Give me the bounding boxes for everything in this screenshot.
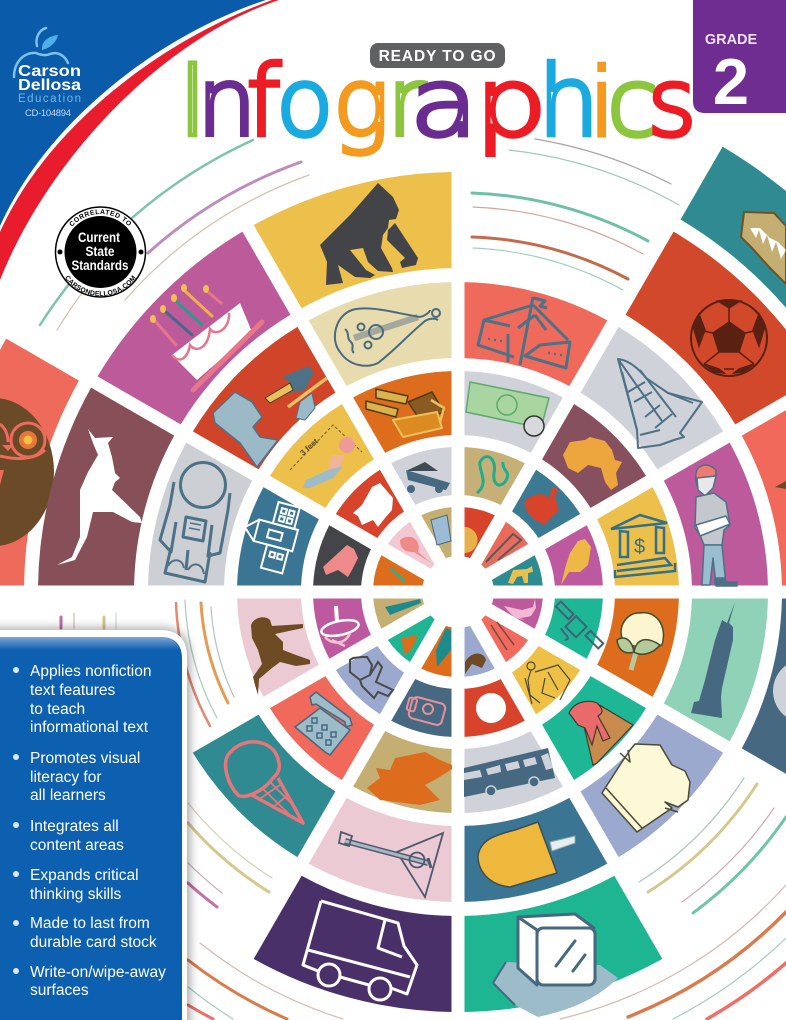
sector: birthday cake xyxy=(98,205,314,444)
sector: statue xyxy=(193,308,354,483)
sector: jar xyxy=(391,679,452,737)
sector: three feet xyxy=(270,391,390,517)
bullet list: Made to last from xyxy=(30,915,150,932)
panel: features list xyxy=(0,628,190,1020)
sector: horse xyxy=(491,555,550,607)
sector: money xyxy=(464,371,563,453)
logo: Carson Dellosa xyxy=(14,28,81,119)
icon: snake xyxy=(477,457,508,493)
sector: coal car xyxy=(391,433,472,513)
sector: skeleton xyxy=(500,641,580,722)
title: I xyxy=(178,44,207,159)
sector: turkey xyxy=(507,470,588,550)
logo: Carson Dellosa: Carson xyxy=(18,63,81,80)
inner ring sectors xyxy=(366,500,550,684)
title: r xyxy=(387,49,426,158)
sector: clock xyxy=(742,598,786,796)
logo: Carson Dellosa: CD-104894 xyxy=(25,108,71,119)
icon: canary xyxy=(561,539,591,585)
icon: t-shirt xyxy=(602,744,690,832)
icon: cake xyxy=(150,284,262,390)
bullet list: surfaces xyxy=(30,982,89,999)
sector: phone xyxy=(421,500,473,559)
sector: bison xyxy=(313,525,371,586)
bullet list: thinking skills xyxy=(30,886,122,903)
bullet list: Write-on/wipe-away xyxy=(30,964,166,981)
sector: gorilla xyxy=(254,126,493,343)
sector: telephone xyxy=(257,660,383,780)
sector: soccer ball xyxy=(606,232,786,448)
sector: kangaroo xyxy=(38,388,174,586)
bullet list: all learners xyxy=(30,787,106,804)
icon: popsicle xyxy=(478,822,575,887)
title: g xyxy=(333,49,389,158)
sector: snake xyxy=(464,447,525,505)
icon: truck xyxy=(303,901,417,1000)
icon: bones xyxy=(525,662,570,704)
icon: africa map xyxy=(563,437,622,490)
icon: telephone xyxy=(295,692,352,755)
icon: sheep xyxy=(353,483,393,527)
title: s xyxy=(648,49,696,158)
icon: coal car xyxy=(406,462,450,493)
sector: africa xyxy=(533,404,659,524)
title: p xyxy=(475,49,547,158)
icon: partial animal xyxy=(775,481,786,489)
title: n xyxy=(197,49,257,158)
sector: gazelle xyxy=(492,598,543,629)
sector: space shuttle xyxy=(567,327,742,488)
sector: bus xyxy=(437,716,563,836)
sector: delivery truck xyxy=(254,876,452,1012)
badge: Current State Standards xyxy=(54,206,146,298)
sector: empire state building xyxy=(664,598,768,741)
icon: spinning top xyxy=(320,606,360,646)
sector: bank xyxy=(582,487,702,613)
grade tab: 2 xyxy=(713,45,749,118)
icon: fallen statue xyxy=(213,366,327,467)
icon: melting ice cube xyxy=(493,914,618,1017)
icon: shuttle xyxy=(618,359,702,448)
bullet list: literacy for xyxy=(30,769,102,786)
icon: chest xyxy=(366,389,444,437)
title: i xyxy=(589,49,615,158)
logo: Carson Dellosa: Dellosa xyxy=(18,77,81,94)
blue corner with red swoosh xyxy=(0,0,279,280)
sector: tube xyxy=(366,577,425,629)
logo: Carson Dellosa: Education xyxy=(18,93,81,105)
sector: oud xyxy=(309,249,484,411)
sector: tent xyxy=(464,282,607,386)
icon: kangaroo xyxy=(57,429,142,565)
badge: Current State Standards: Standards xyxy=(72,258,128,273)
sector: leaf xyxy=(421,626,452,677)
icon: building xyxy=(236,495,304,574)
icon: clock xyxy=(773,659,786,723)
icon: baseball xyxy=(476,693,506,723)
badge: Ready to Go: READY TO GO xyxy=(379,48,496,65)
icon: bank: $ xyxy=(634,536,645,558)
icon: balalaika xyxy=(339,832,443,897)
bullet list: content areas xyxy=(30,837,124,854)
sector: ice cube xyxy=(423,841,662,1020)
icon: bison xyxy=(323,545,358,577)
sector: mantis xyxy=(373,555,424,586)
title: o xyxy=(276,49,334,158)
icon: crocodile jaw xyxy=(741,212,786,284)
sector: treasure chest xyxy=(353,348,479,468)
sector: baseball xyxy=(444,671,525,751)
bullet list: durable card stock xyxy=(30,934,157,951)
badge: Current State Standards: State xyxy=(86,244,115,259)
icon: bus xyxy=(464,748,555,797)
icon: satellite xyxy=(556,602,603,648)
title: a xyxy=(410,49,478,158)
sector: volcano xyxy=(526,667,646,793)
badge: Current State Standards: Current xyxy=(78,230,120,245)
sector: orange fox xyxy=(353,731,452,813)
sector: canary xyxy=(537,525,617,606)
sector: baseball batter xyxy=(214,571,334,697)
grade tab: GRADE xyxy=(705,32,758,48)
badge: Current State Standards: CARSONDELLOSA.COM xyxy=(66,275,136,296)
bullet list: to teach xyxy=(30,701,85,718)
bullet list: Applies nonfiction xyxy=(30,663,152,680)
sector: green animal xyxy=(384,603,435,662)
icon: ice cream xyxy=(226,742,303,823)
icon: oud xyxy=(335,308,440,366)
icon: turkey xyxy=(524,487,559,525)
badge: Current State Standards: CORRELATED TO xyxy=(70,209,131,226)
sector: pink tool xyxy=(388,518,447,569)
bullet list xyxy=(13,663,166,999)
icon: worker xyxy=(695,465,737,586)
sector: coin xyxy=(464,507,495,558)
icon: gorilla xyxy=(320,183,418,285)
sector: satellite xyxy=(545,598,603,659)
sector: cotton xyxy=(597,598,679,697)
sector: balalaika xyxy=(309,798,452,902)
bullet list: Integrates all xyxy=(30,818,119,835)
icon: cotton boll xyxy=(617,613,663,670)
icon: astronaut xyxy=(160,462,230,582)
sector: astronaut xyxy=(148,443,252,586)
bullet list: informational text xyxy=(30,719,149,736)
icon: volcano xyxy=(569,701,633,765)
sector: crocodile xyxy=(653,147,786,390)
bullet list: text features xyxy=(30,682,116,699)
sector: ice cream cone xyxy=(174,696,349,857)
title: f xyxy=(246,45,281,158)
title: c xyxy=(607,49,659,158)
sector: coral right edge xyxy=(707,388,786,627)
sector: owl xyxy=(0,339,79,586)
icon: jar xyxy=(406,696,446,726)
icon: teddy bear xyxy=(350,657,393,698)
icon: dollar bill and coin xyxy=(466,382,549,436)
sector: sheep xyxy=(336,462,416,543)
sector: white house xyxy=(236,487,319,586)
bullet list: Promotes visual xyxy=(30,750,140,767)
icon: skyscraper xyxy=(691,602,735,718)
icon: tent xyxy=(478,297,570,368)
sector: teddy bear xyxy=(328,634,409,714)
sector: spinning top xyxy=(299,578,379,659)
icon: soccer ball xyxy=(691,300,767,376)
badge: Ready to Go xyxy=(370,43,505,68)
sector: pencils xyxy=(469,615,528,666)
icon: measured child: 3 feet xyxy=(298,437,320,457)
grade tab xyxy=(693,0,786,118)
sector: construction worker xyxy=(639,443,786,618)
icon: apple xyxy=(14,28,68,77)
icon: orange animal xyxy=(367,752,452,805)
title: h xyxy=(538,45,599,158)
sector: ant xyxy=(443,625,495,684)
sector: t-shirt xyxy=(562,701,723,876)
bullet list: Expands critical xyxy=(30,867,139,884)
icon: owl xyxy=(0,398,54,546)
sector: popsicle xyxy=(432,773,607,935)
sector: pencil case xyxy=(481,522,532,581)
icon: batter xyxy=(251,617,310,695)
